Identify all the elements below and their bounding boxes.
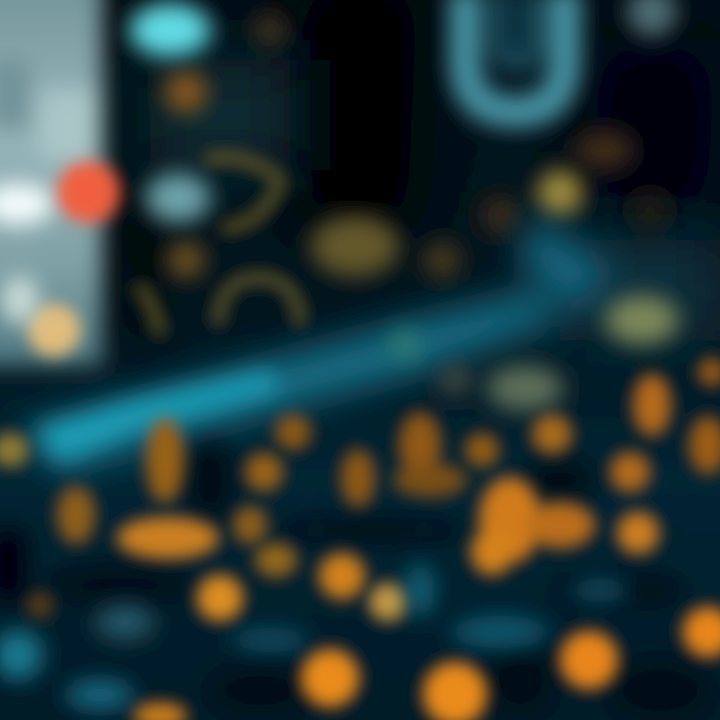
pale spot: [2, 276, 38, 324]
left edge yellow spot: [0, 434, 28, 466]
dark mottling: [0, 440, 710, 720]
yellow spot at diagonal top: [538, 171, 582, 215]
pale yellow dot: [28, 304, 80, 356]
dark upper field: [110, 0, 720, 340]
muted orange dots upper: [166, 14, 668, 278]
orange circuit blobs: [58, 359, 720, 620]
white glow: [0, 183, 54, 225]
bright cyan band highlight: [35, 370, 280, 462]
bright orange dots bottom: [28, 593, 720, 720]
red-orange dot: [57, 161, 119, 223]
olive pale blobs right: [390, 296, 678, 410]
teal diagonal band: [20, 215, 610, 470]
teal traces at bottom: [0, 564, 628, 709]
cyan top glow: [130, 4, 210, 56]
panel: light left column: [0, 0, 102, 365]
top right faint glow: [628, 0, 676, 36]
teal ring at top: [465, 0, 565, 112]
olive ring shapes: [138, 158, 300, 335]
olive blob: [311, 216, 399, 276]
pale teal glow: [146, 174, 210, 222]
